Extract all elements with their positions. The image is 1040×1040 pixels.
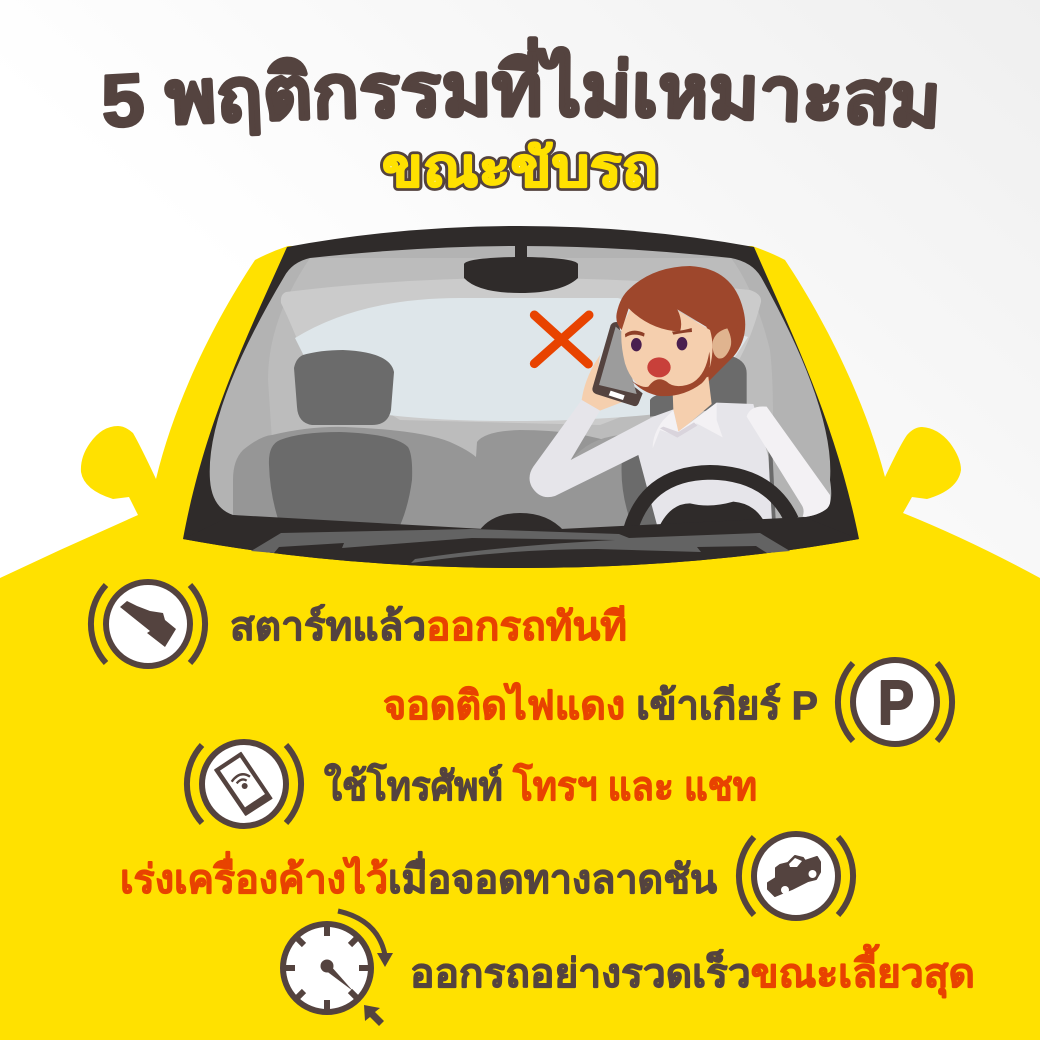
left bracket (739, 837, 754, 915)
steering hub (660, 502, 763, 524)
rear wheel (808, 870, 816, 878)
ticks (284, 925, 370, 1011)
glass inner shade (268, 258, 773, 456)
glass (210, 246, 832, 518)
item 4 icon: car on slope (739, 834, 853, 918)
item 4 text: เร่งเครื่องค้างไว้เมื่อจอดทางลาดชัน (120, 851, 717, 902)
item 3 text: ใช้โทรศัพท์ โทรฯ และ แชท (324, 763, 757, 809)
dial (754, 834, 838, 918)
small arrow (364, 1005, 384, 1026)
glass highlight (281, 278, 761, 425)
collar (653, 403, 723, 448)
phone (592, 322, 643, 406)
rear window (295, 298, 748, 421)
driver headrest (650, 357, 747, 417)
dial (106, 582, 190, 666)
neck (673, 377, 712, 433)
wifi waves (232, 774, 250, 783)
item 5 text: ออกรถอย่างรวดเร็วขณะเลี้ยวสุด (410, 944, 975, 999)
needle hub (320, 960, 334, 972)
dial (202, 742, 286, 826)
item 1 icon: pedal foot (91, 582, 205, 666)
wifi dot (242, 783, 248, 789)
right eye (677, 337, 687, 350)
front wheel (781, 886, 789, 894)
phone body (215, 753, 272, 815)
rear bench (233, 426, 628, 529)
right bracket (190, 585, 205, 663)
collar shadow (660, 422, 697, 438)
left bracket (91, 585, 106, 663)
shirt (530, 400, 772, 530)
car body with side mirrors (0, 246, 1040, 1040)
left eye (631, 338, 642, 351)
face (621, 310, 712, 395)
right bracket (838, 837, 853, 915)
rear view mirror (464, 244, 578, 293)
phone screen (220, 757, 265, 807)
item 5 icon: speedometer (283, 911, 393, 1026)
mouth (647, 357, 671, 377)
right sleeve (747, 406, 830, 520)
car window (789, 858, 802, 867)
dial (853, 660, 937, 744)
phone button (609, 391, 625, 400)
eyebrows (625, 328, 692, 337)
item 1 text: สตาร์ทแล้วออกรถทันที (230, 604, 627, 649)
left bracket (838, 663, 853, 741)
arrow head (377, 953, 393, 967)
phone screen (599, 327, 637, 394)
item 3 icon: smartphone (187, 742, 301, 826)
curved arrow (338, 911, 385, 955)
arm gap shadow (574, 436, 617, 458)
passenger headrest (294, 350, 394, 425)
ear (713, 328, 731, 359)
hand (582, 355, 623, 411)
right bracket (286, 745, 301, 823)
windshield bottom dark band (183, 515, 859, 568)
steering wheel (629, 472, 792, 537)
passenger seat (269, 432, 412, 532)
hair (616, 266, 743, 337)
dial (283, 924, 371, 1012)
phone case (592, 322, 643, 406)
dashboard centre (479, 513, 564, 531)
windshield interior (200, 240, 840, 540)
right bracket (937, 663, 952, 741)
item 2 icon: parking P (838, 660, 952, 744)
item 2 text: จอดติดไฟแดง เข้าเกียร์ P (383, 682, 818, 728)
eyes (631, 337, 687, 351)
back hair (707, 310, 745, 383)
needle (325, 965, 353, 991)
red cross (534, 315, 589, 364)
driver seat (622, 452, 776, 526)
car silhouette (768, 856, 820, 896)
windshield frame (183, 226, 859, 568)
subtitle fill: ขณะขับรถ (382, 138, 658, 198)
left bracket (187, 745, 202, 823)
shoe (120, 601, 176, 647)
car illustration (0, 226, 1040, 1040)
phone (215, 753, 272, 815)
subtitle outline: ขณะขับรถ (382, 138, 658, 198)
driver (530, 266, 830, 537)
dashboard (251, 529, 790, 563)
letter P: P (878, 669, 914, 738)
title: 5 พฤติกรรมที่ไม่เหมาะสม (103, 36, 937, 136)
beard (632, 352, 710, 396)
subtitle (382, 138, 658, 198)
